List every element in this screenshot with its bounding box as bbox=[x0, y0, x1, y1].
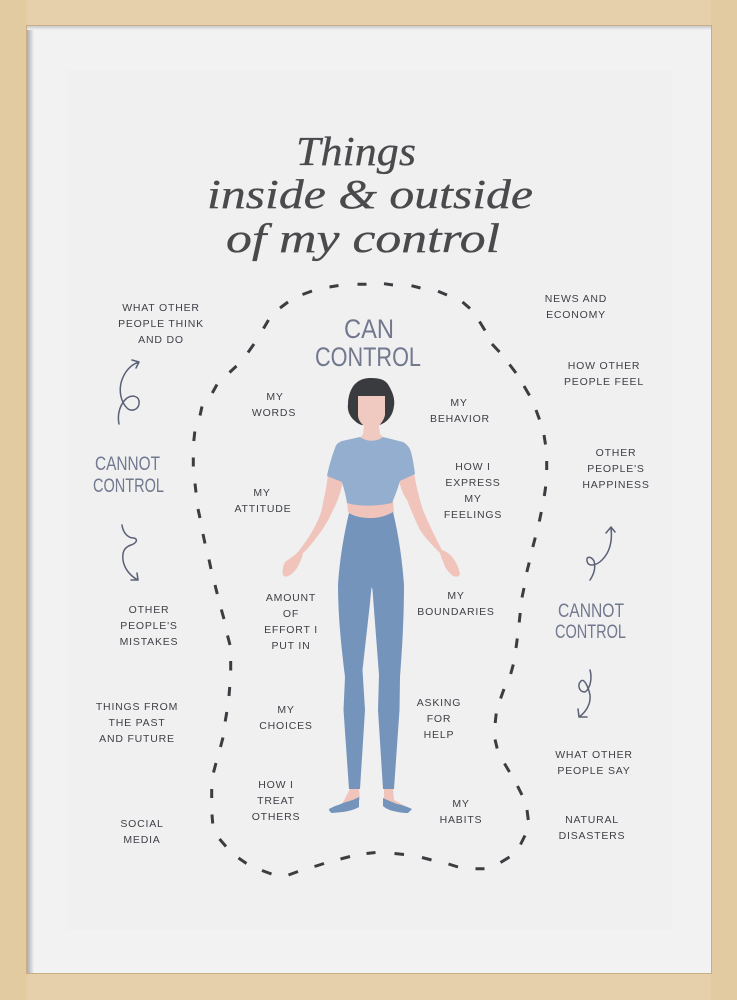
label: my words: MY bbox=[266, 391, 284, 403]
label: other people's mistakes: OTHER bbox=[129, 604, 169, 616]
label: other people's mistakes: MISTAKES bbox=[120, 636, 178, 648]
label: other people's happiness: HAPPINESS bbox=[582, 479, 650, 491]
label: my behavior: MY bbox=[450, 397, 468, 409]
right foot and shoe bbox=[383, 789, 412, 813]
heading: cannot control left: CANNOT bbox=[95, 454, 160, 475]
label: news and economy: ECONOMY bbox=[546, 309, 606, 321]
label: things from the past and future: THINGS FROM bbox=[96, 701, 178, 713]
label: what other people think and do: AND DO bbox=[138, 334, 184, 346]
heading: can control bbox=[315, 314, 421, 372]
label: my attitude: ATTITUDE bbox=[235, 503, 291, 515]
heading: can control: CONTROL bbox=[315, 342, 421, 372]
label: what other people say: PEOPLE SAY bbox=[557, 765, 631, 777]
heading: can control: CAN bbox=[344, 314, 394, 344]
crop top bbox=[327, 437, 415, 506]
label: how i express my feelings: MY bbox=[464, 493, 482, 505]
label: amount of effort i put in: PUT IN bbox=[271, 640, 311, 652]
label: amount of effort i put in: AMOUNT bbox=[266, 592, 316, 604]
arrow: right upper bbox=[587, 527, 615, 580]
label: things from the past and future: THE PAST bbox=[109, 717, 165, 729]
heading: cannot control right: CANNOT bbox=[558, 601, 624, 622]
label: my behavior: BEHAVIOR bbox=[430, 413, 490, 425]
label: how i treat others: OTHERS bbox=[252, 811, 300, 823]
label: how i treat others: TREAT bbox=[257, 795, 295, 807]
label: asking for help: FOR bbox=[427, 713, 451, 725]
arrow: left lower bbox=[122, 525, 138, 580]
label: what other people say: WHAT OTHER bbox=[555, 749, 633, 761]
label: my habits: HABITS bbox=[440, 814, 482, 826]
label: my attitude: MY bbox=[253, 487, 271, 499]
label: my words: WORDS bbox=[252, 407, 296, 419]
dashed boundary bbox=[193, 284, 547, 875]
label: other people's happiness: PEOPLE'S bbox=[587, 463, 645, 475]
title: inside & outside bbox=[207, 171, 533, 217]
label: amount of effort i put in: OF bbox=[283, 608, 299, 620]
heading: cannot control right bbox=[555, 601, 626, 643]
label: my choices: CHOICES bbox=[259, 720, 313, 732]
left arm bbox=[283, 474, 343, 577]
label: asking for help: ASKING bbox=[417, 697, 461, 709]
label: natural disasters: DISASTERS bbox=[559, 830, 625, 842]
leggings bbox=[338, 512, 404, 789]
midriff bbox=[347, 500, 394, 518]
label: what other people think and do: PEOPLE THINK bbox=[118, 318, 204, 330]
label: how i express my feelings: HOW I bbox=[455, 461, 491, 473]
label: natural disasters: NATURAL bbox=[565, 814, 619, 826]
label: how other people feel: PEOPLE FEEL bbox=[564, 376, 644, 388]
label: social media: SOCIAL bbox=[120, 818, 164, 830]
label: social media: MEDIA bbox=[123, 834, 161, 846]
label: how i express my feelings: FEELINGS bbox=[444, 509, 502, 521]
title bbox=[207, 128, 533, 261]
heading: cannot control left bbox=[93, 454, 164, 497]
label: what other people think and do: WHAT OTHER bbox=[122, 302, 200, 314]
label: my boundaries: MY bbox=[447, 590, 465, 602]
title: Things bbox=[296, 128, 416, 174]
label: how i express my feelings: EXPRESS bbox=[445, 477, 501, 489]
label: my choices: MY bbox=[277, 704, 295, 716]
heading: cannot control left: CONTROL bbox=[93, 476, 164, 497]
right arm bbox=[399, 473, 460, 577]
arrow: right lower bbox=[578, 670, 591, 717]
label: amount of effort i put in: EFFORT I bbox=[264, 624, 318, 636]
label: my boundaries: BOUNDARIES bbox=[417, 606, 495, 618]
left foot and shoe bbox=[329, 789, 360, 813]
label: news and economy: NEWS AND bbox=[545, 293, 607, 305]
arrow: left upper bbox=[118, 360, 139, 424]
label: other people's happiness: OTHER bbox=[596, 447, 636, 459]
face and neck bbox=[358, 396, 385, 441]
label: how other people feel: HOW OTHER bbox=[568, 360, 640, 372]
label: asking for help: HELP bbox=[424, 729, 454, 741]
label: things from the past and future: AND FUTURE bbox=[99, 733, 175, 745]
label: how i treat others: HOW I bbox=[258, 779, 294, 791]
hair bbox=[348, 378, 394, 426]
title: of my control bbox=[226, 215, 500, 261]
label: my habits: MY bbox=[452, 798, 470, 810]
label: other people's mistakes: PEOPLE'S bbox=[120, 620, 178, 632]
heading: cannot control right: CONTROL bbox=[555, 622, 626, 643]
figure: woman bbox=[283, 378, 460, 813]
